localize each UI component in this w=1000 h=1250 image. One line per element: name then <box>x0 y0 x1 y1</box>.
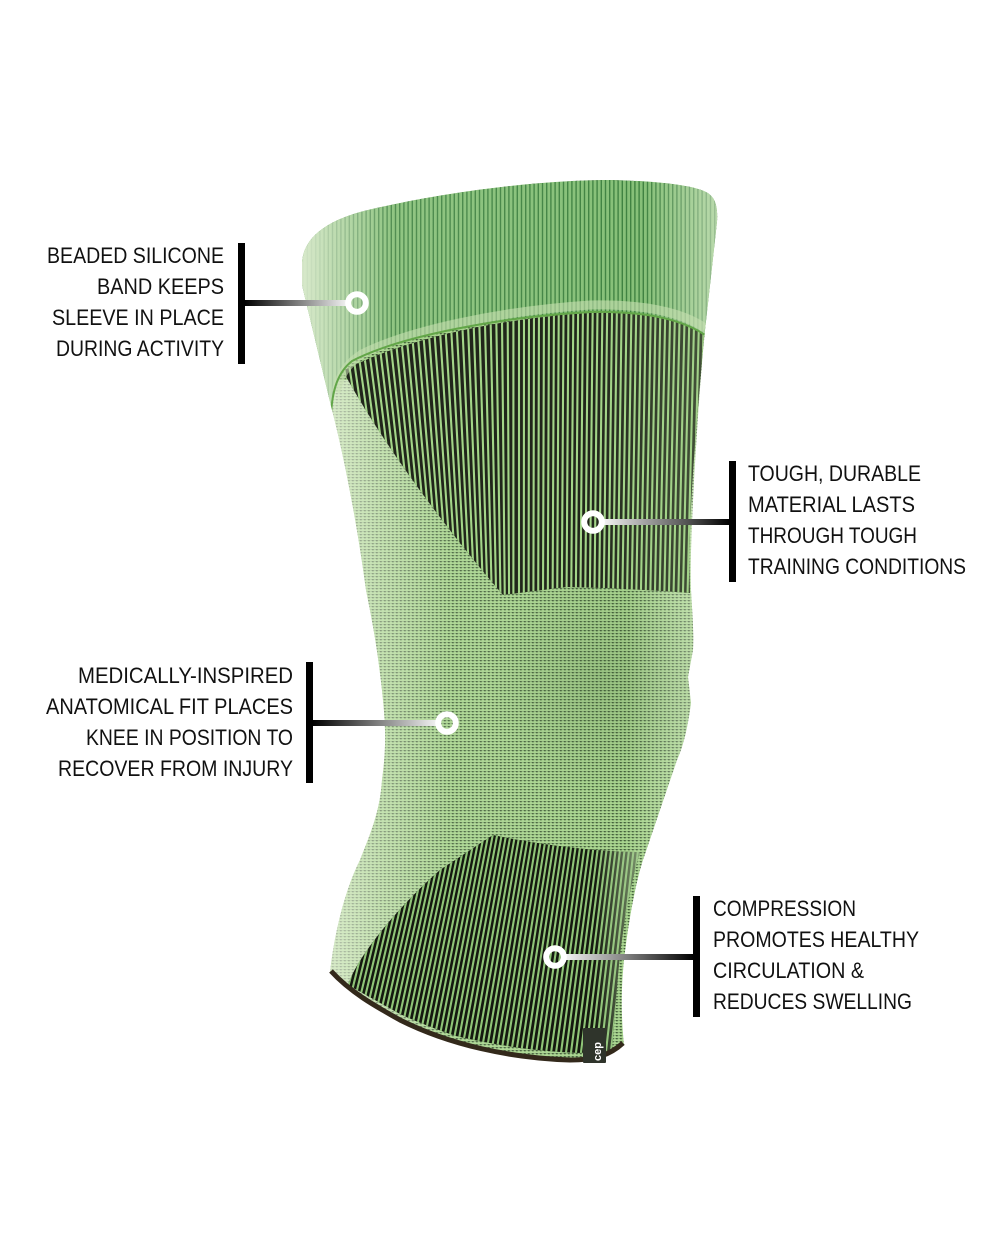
callout text: REDUCES SWELLING <box>713 989 912 1014</box>
callout text: CIRCULATION & <box>713 958 864 983</box>
marker ring <box>438 714 456 732</box>
vertical bar <box>729 461 736 582</box>
marker ring <box>546 948 564 966</box>
leader line <box>603 519 730 525</box>
callout text: DURING ACTIVITY <box>56 336 224 361</box>
lower dark compression panel <box>348 835 640 1053</box>
callout text: BEADED SILICONE <box>47 243 224 268</box>
vertical bar <box>238 243 245 364</box>
callout text: COMPRESSION <box>713 896 856 921</box>
callout text <box>713 896 919 1014</box>
callout: durable material <box>584 461 966 582</box>
callout: anatomical fit <box>46 662 456 783</box>
callout: compression <box>546 896 919 1017</box>
callout text: KNEE IN POSITION TO <box>86 725 293 750</box>
beaded silicone top band <box>302 180 717 416</box>
callout text: TOUGH, DURABLE <box>748 461 921 486</box>
callout text: ANATOMICAL FIT PLACES <box>46 694 293 719</box>
marker ring <box>348 294 366 312</box>
callout text <box>46 663 293 781</box>
callout: beaded silicone band <box>47 243 366 364</box>
callout text: MEDICALLY-INSPIRED <box>78 663 293 688</box>
leader line <box>565 954 694 960</box>
logo tag: cep <box>592 1042 604 1061</box>
knee sleeve product <box>290 170 730 1070</box>
callout text <box>748 461 966 579</box>
vertical bar <box>693 896 700 1017</box>
marker ring <box>584 513 602 531</box>
callout text: BAND KEEPS <box>97 274 224 299</box>
callout text: RECOVER FROM INJURY <box>58 756 293 781</box>
vertical bar <box>306 662 313 783</box>
callout text <box>47 243 224 361</box>
callout text: THROUGH TOUGH <box>748 523 917 548</box>
callout text: MATERIAL LASTS <box>748 492 915 517</box>
leader line <box>245 300 348 306</box>
callout text: TRAINING CONDITIONS <box>748 554 966 579</box>
upper dark compression panel <box>344 312 704 595</box>
callout text: PROMOTES HEALTHY <box>713 927 919 952</box>
infographic canvas <box>46 180 966 1063</box>
logo tag <box>583 1028 606 1063</box>
bottom hem <box>331 971 623 1060</box>
band seam <box>336 305 705 392</box>
sleeve body knit <box>290 170 730 1070</box>
leader line <box>313 720 438 726</box>
callout text: SLEEVE IN PLACE <box>52 305 224 330</box>
